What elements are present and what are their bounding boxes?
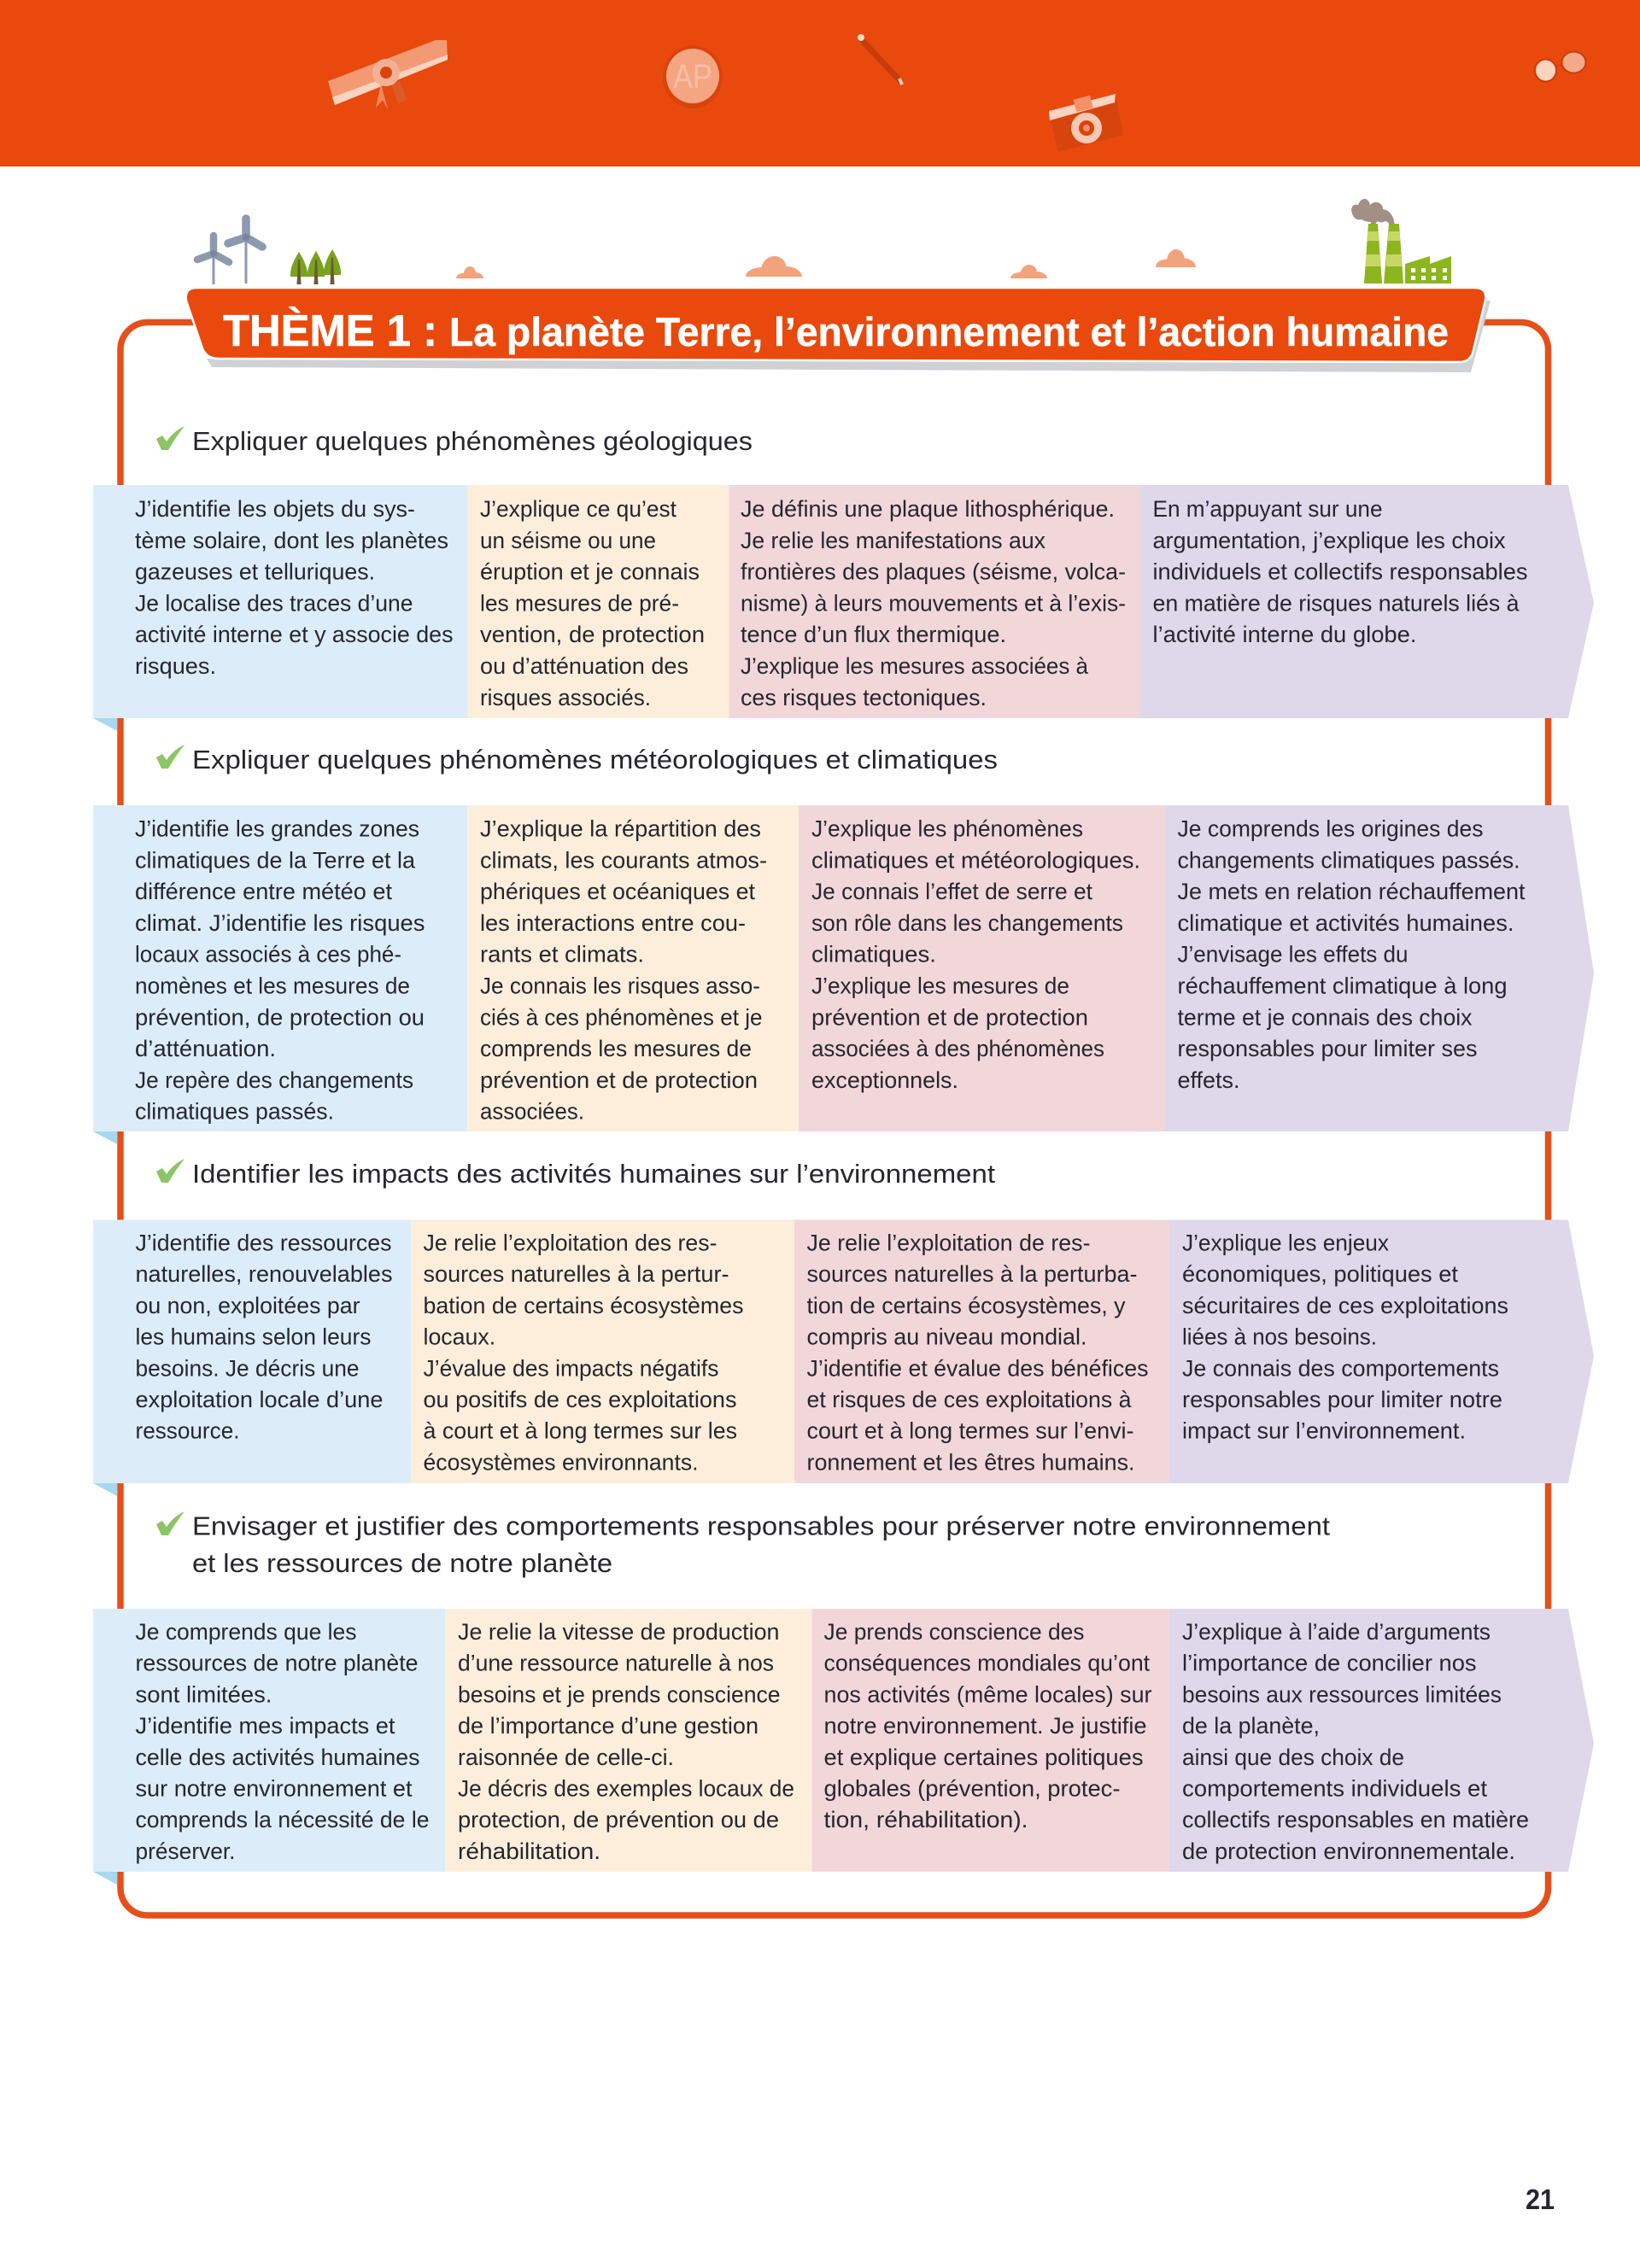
column 1 (93, 805, 468, 1131)
column 2 (445, 1609, 812, 1872)
column 3: et explique certaines politiques (823, 1745, 1143, 1770)
column 1: risques. (135, 653, 216, 679)
icon: camera (1049, 94, 1123, 152)
column 1: J’identifie des ressources (135, 1230, 391, 1255)
column 1 (93, 1609, 445, 1872)
heading 4: Envisager et justifier des comportements responsables pour préserver notre environnement (192, 1511, 1330, 1540)
column 1: Je localise des traces d’une (135, 590, 413, 616)
column 4: impact sur l’environnement. (1182, 1418, 1466, 1444)
column 3: et risques de ces exploitations à (806, 1387, 1132, 1412)
column 3: ronnement et les êtres humains. (806, 1449, 1134, 1475)
column 4: Je connais des comportements (1182, 1355, 1499, 1381)
heading 3: Identifier les impacts des activités humaines sur l’environnement (192, 1159, 995, 1189)
column 2 (411, 1219, 794, 1483)
column 4: terme et je connais des choix (1177, 1004, 1473, 1030)
header band (0, 0, 1640, 167)
column 1: besoins. Je décris une (135, 1355, 359, 1381)
icon: pencil (858, 34, 902, 85)
column 4: réchauffement climatique à long (1177, 973, 1507, 999)
column 3: notre environnement. Je justifie (823, 1713, 1146, 1739)
band 3 (93, 1219, 1594, 1496)
column 4: J’explique les enjeux (1182, 1230, 1389, 1255)
column 1: climatiques passés. (135, 1099, 334, 1125)
icon: check (156, 745, 184, 769)
column 3: globales (prévention, protec- (823, 1776, 1121, 1802)
column 1: celle des activités humaines (135, 1745, 420, 1770)
column 3: climatiques et météorologiques. (811, 847, 1140, 873)
column 4: effets. (1177, 1067, 1240, 1093)
icon: trees (290, 249, 341, 284)
heading 4 (156, 1511, 1330, 1578)
column 1: d’atténuation. (135, 1036, 276, 1061)
column 2: comprends les mesures de (480, 1036, 752, 1061)
column 4: J’explique à l’aide d’arguments (1182, 1619, 1491, 1645)
column 2: les interactions entre cou- (480, 910, 746, 936)
column 1: ressources de notre planète (135, 1651, 419, 1676)
banner title: THÈME 1 : (223, 307, 437, 356)
column 3: nisme) à leurs mouvements et à l’exis- (741, 590, 1126, 616)
column 3: Je relie l’exploitation de res- (806, 1230, 1090, 1255)
column 4: l’importance de concilier nos (1182, 1651, 1477, 1676)
heading 4: et les ressources de notre planète (192, 1548, 612, 1578)
column 3: Je prends conscience des (823, 1619, 1085, 1645)
column 1: J’identifie mes impacts et (135, 1713, 395, 1739)
column 4: collectifs responsables en matière (1182, 1807, 1529, 1833)
column 2: J’explique la répartition des (480, 816, 761, 842)
column 2: J’explique ce qu’est (480, 496, 676, 522)
fold (93, 718, 117, 731)
fold (93, 1872, 117, 1885)
column 2: rants et climats. (480, 942, 644, 967)
column 3: Je connais l’effet de serre et (811, 879, 1092, 904)
icon: sunglasses (1535, 51, 1585, 82)
column 3: associées à des phénomènes (811, 1036, 1104, 1061)
column 2: Je connais les risques asso- (480, 973, 760, 999)
column 2: les mesures de pré- (480, 590, 679, 616)
band 1 (93, 485, 1594, 731)
column 3: Je définis une plaque lithosphérique. (741, 496, 1115, 522)
column 1: préserver. (135, 1838, 236, 1864)
column 4 (1169, 1219, 1594, 1483)
column 4: responsables pour limiter ses (1177, 1036, 1478, 1061)
icon: AP medal (663, 45, 723, 108)
column 4: climatique et activités humaines. (1177, 910, 1514, 936)
column 3: tion de certains écosystèmes, y (806, 1293, 1126, 1318)
column 1: Je repère des changements (135, 1067, 413, 1093)
band 2 (93, 805, 1594, 1144)
column 3: J’identifie et évalue des bénéfices (806, 1355, 1148, 1381)
column 2: de l’importance d’une gestion (458, 1713, 758, 1739)
column 1: tème solaire, dont les planètes (135, 528, 448, 553)
column 2: bation de certains écosystèmes (424, 1293, 743, 1318)
column 1: exploitation locale d’une (135, 1387, 383, 1412)
column 3: J’explique les mesures associées à (741, 653, 1089, 679)
column 4: argumentation, j’explique les choix (1153, 528, 1506, 553)
column 2: prévention et de protection (480, 1067, 758, 1093)
column 4: ainsi que des choix de (1182, 1745, 1404, 1770)
column 3: J’explique les phénomènes (811, 816, 1083, 842)
column 1: les humains selon leurs (135, 1324, 371, 1350)
column 4: liées à nos besoins. (1182, 1324, 1377, 1350)
column 3: court et à long termes sur l’envi- (806, 1418, 1134, 1444)
column 4: En m’appuyant sur une (1153, 496, 1382, 522)
column 4: sécuritaires de ces exploitations (1182, 1293, 1508, 1318)
column 2: phériques et océaniques et (480, 879, 755, 904)
column 4: Je mets en relation réchauffement (1177, 879, 1526, 904)
column 1: climatiques de la Terre et la (135, 847, 416, 873)
column 2: ciés à ces phénomènes et je (480, 1004, 762, 1030)
page number: 21 (1526, 2183, 1555, 2215)
column 2: J’évalue des impacts négatifs (424, 1355, 719, 1381)
column 1: J’identifie les grandes zones (135, 816, 419, 842)
icon: factory (1351, 199, 1451, 284)
column 2: protection, de prévention ou de (458, 1807, 779, 1833)
icon: check (156, 426, 184, 450)
banner shadow (207, 301, 1491, 372)
column 4: J’envisage les effets du (1177, 942, 1408, 967)
column 2 (468, 485, 729, 718)
column 3: J’explique les mesures de (811, 973, 1069, 999)
column 2: d’une ressource naturelle à nos (458, 1651, 774, 1676)
column 3: tion, réhabilitation). (823, 1807, 1028, 1833)
column 1: sont limitées. (135, 1681, 272, 1707)
column 4 (1169, 1609, 1594, 1872)
column 1: ou non, exploitées par (135, 1293, 360, 1318)
column 1: naturelles, renouvelables (135, 1261, 393, 1287)
icon: diploma (328, 40, 448, 109)
column 2: sources naturelles à la pertur- (424, 1261, 729, 1287)
column 1: différence entre météo et (135, 879, 392, 904)
column 1: activité interne et y associe des (135, 622, 453, 647)
column 4: comportements individuels et (1182, 1776, 1488, 1802)
column 3: sources naturelles à la perturba- (806, 1261, 1138, 1287)
column 3: exceptionnels. (811, 1067, 958, 1093)
column 2 (467, 805, 799, 1131)
icon: check (156, 1511, 184, 1535)
column 2: Je relie l’exploitation des res- (424, 1230, 718, 1255)
column 2: ou positifs de ces exploitations (424, 1387, 736, 1412)
column 3: son rôle dans les changements (811, 910, 1123, 936)
column 2: raisonnée de celle-ci. (458, 1745, 674, 1770)
column 2: associées. (480, 1099, 584, 1125)
column 2: vention, de protection (480, 622, 705, 647)
title banner (186, 288, 1491, 372)
column 1: climat. J’identifie les risques (135, 910, 425, 936)
heading 1: Expliquer quelques phénomènes géologiques (192, 426, 753, 456)
column 2: réhabilitation. (458, 1838, 600, 1864)
column 3: climatiques. (811, 942, 936, 967)
column 1: prévention, de protection ou (135, 1004, 425, 1030)
column 1 (93, 1219, 411, 1483)
fold (93, 1131, 117, 1144)
column 2: éruption et je connais (480, 559, 700, 585)
column 3: conséquences mondiales qu’ont (823, 1651, 1151, 1676)
column 1: ressource. (135, 1418, 239, 1444)
column 4: l’activité interne du globe. (1153, 622, 1416, 647)
column 2: ou d’atténuation des (480, 653, 688, 679)
orange frame (120, 323, 1548, 1915)
column 2: climats, les courants atmos- (480, 847, 767, 873)
icon: wind turbines (197, 219, 262, 284)
column 1 (93, 485, 468, 718)
column 3 (729, 485, 1141, 718)
column 1: locaux associés à ces phé- (135, 942, 401, 967)
column 1: comprends la nécessité de le (135, 1807, 429, 1833)
heading 2: Expliquer quelques phénomènes météorologiques et climatiques (192, 745, 998, 775)
icon: AP medal: AP (673, 58, 712, 96)
column 3 (794, 1219, 1169, 1483)
column 3: nos activités (même locales) sur (823, 1681, 1152, 1707)
column 4: économiques, politiques et (1182, 1261, 1459, 1287)
column 3 (799, 805, 1166, 1131)
column 4: en matière de risques naturels liés à (1153, 590, 1520, 616)
column 3: frontières des plaques (séisme, volca- (741, 559, 1126, 585)
column 4: Je comprends les origines des (1177, 816, 1483, 842)
column 1: nomènes et les mesures de (135, 973, 410, 999)
column 4 (1165, 805, 1594, 1131)
column 2: Je décris des exemples locaux de (458, 1776, 794, 1802)
column 3: Je relie les manifestations aux (741, 528, 1046, 553)
column 2: risques associés. (480, 685, 651, 710)
column 3 (811, 1609, 1170, 1872)
column 2: écosystèmes environnants. (424, 1449, 699, 1475)
column 3: ces risques tectoniques. (741, 685, 987, 710)
column 2: locaux. (424, 1324, 495, 1350)
column 1: sur notre environnement et (135, 1776, 413, 1802)
column 4: responsables pour limiter notre (1182, 1387, 1502, 1412)
column 4: changements climatiques passés. (1177, 847, 1520, 873)
column 1: J’identifie les objets du sys- (135, 496, 415, 522)
column 2: à court et à long termes sur les (424, 1418, 737, 1444)
icon: check (156, 1159, 184, 1183)
icon: clouds (456, 249, 1196, 278)
column 4: de la planète, (1182, 1713, 1320, 1739)
banner title: La planète Terre, l’environnement et l’action humaine (449, 309, 1449, 354)
column 3: prévention et de protection (811, 1004, 1088, 1030)
column 2: besoins et je prends conscience (458, 1681, 781, 1707)
column 1: gazeuses et telluriques. (135, 559, 375, 585)
banner shape (186, 288, 1485, 362)
column 1: Je comprends que les (135, 1619, 357, 1645)
band 4 (93, 1609, 1594, 1885)
fold (93, 1483, 117, 1496)
column 2: Je relie la vitesse de production (458, 1619, 779, 1645)
column 4 (1140, 485, 1594, 718)
column 2: un séisme ou une (480, 528, 656, 553)
column 3: tence d’un flux thermique. (741, 622, 1006, 647)
column 3: compris au niveau mondial. (806, 1324, 1086, 1350)
column 4: besoins aux ressources limitées (1182, 1681, 1502, 1707)
column 4: de protection environnementale. (1182, 1838, 1515, 1864)
column 4: individuels et collectifs responsables (1153, 559, 1527, 585)
